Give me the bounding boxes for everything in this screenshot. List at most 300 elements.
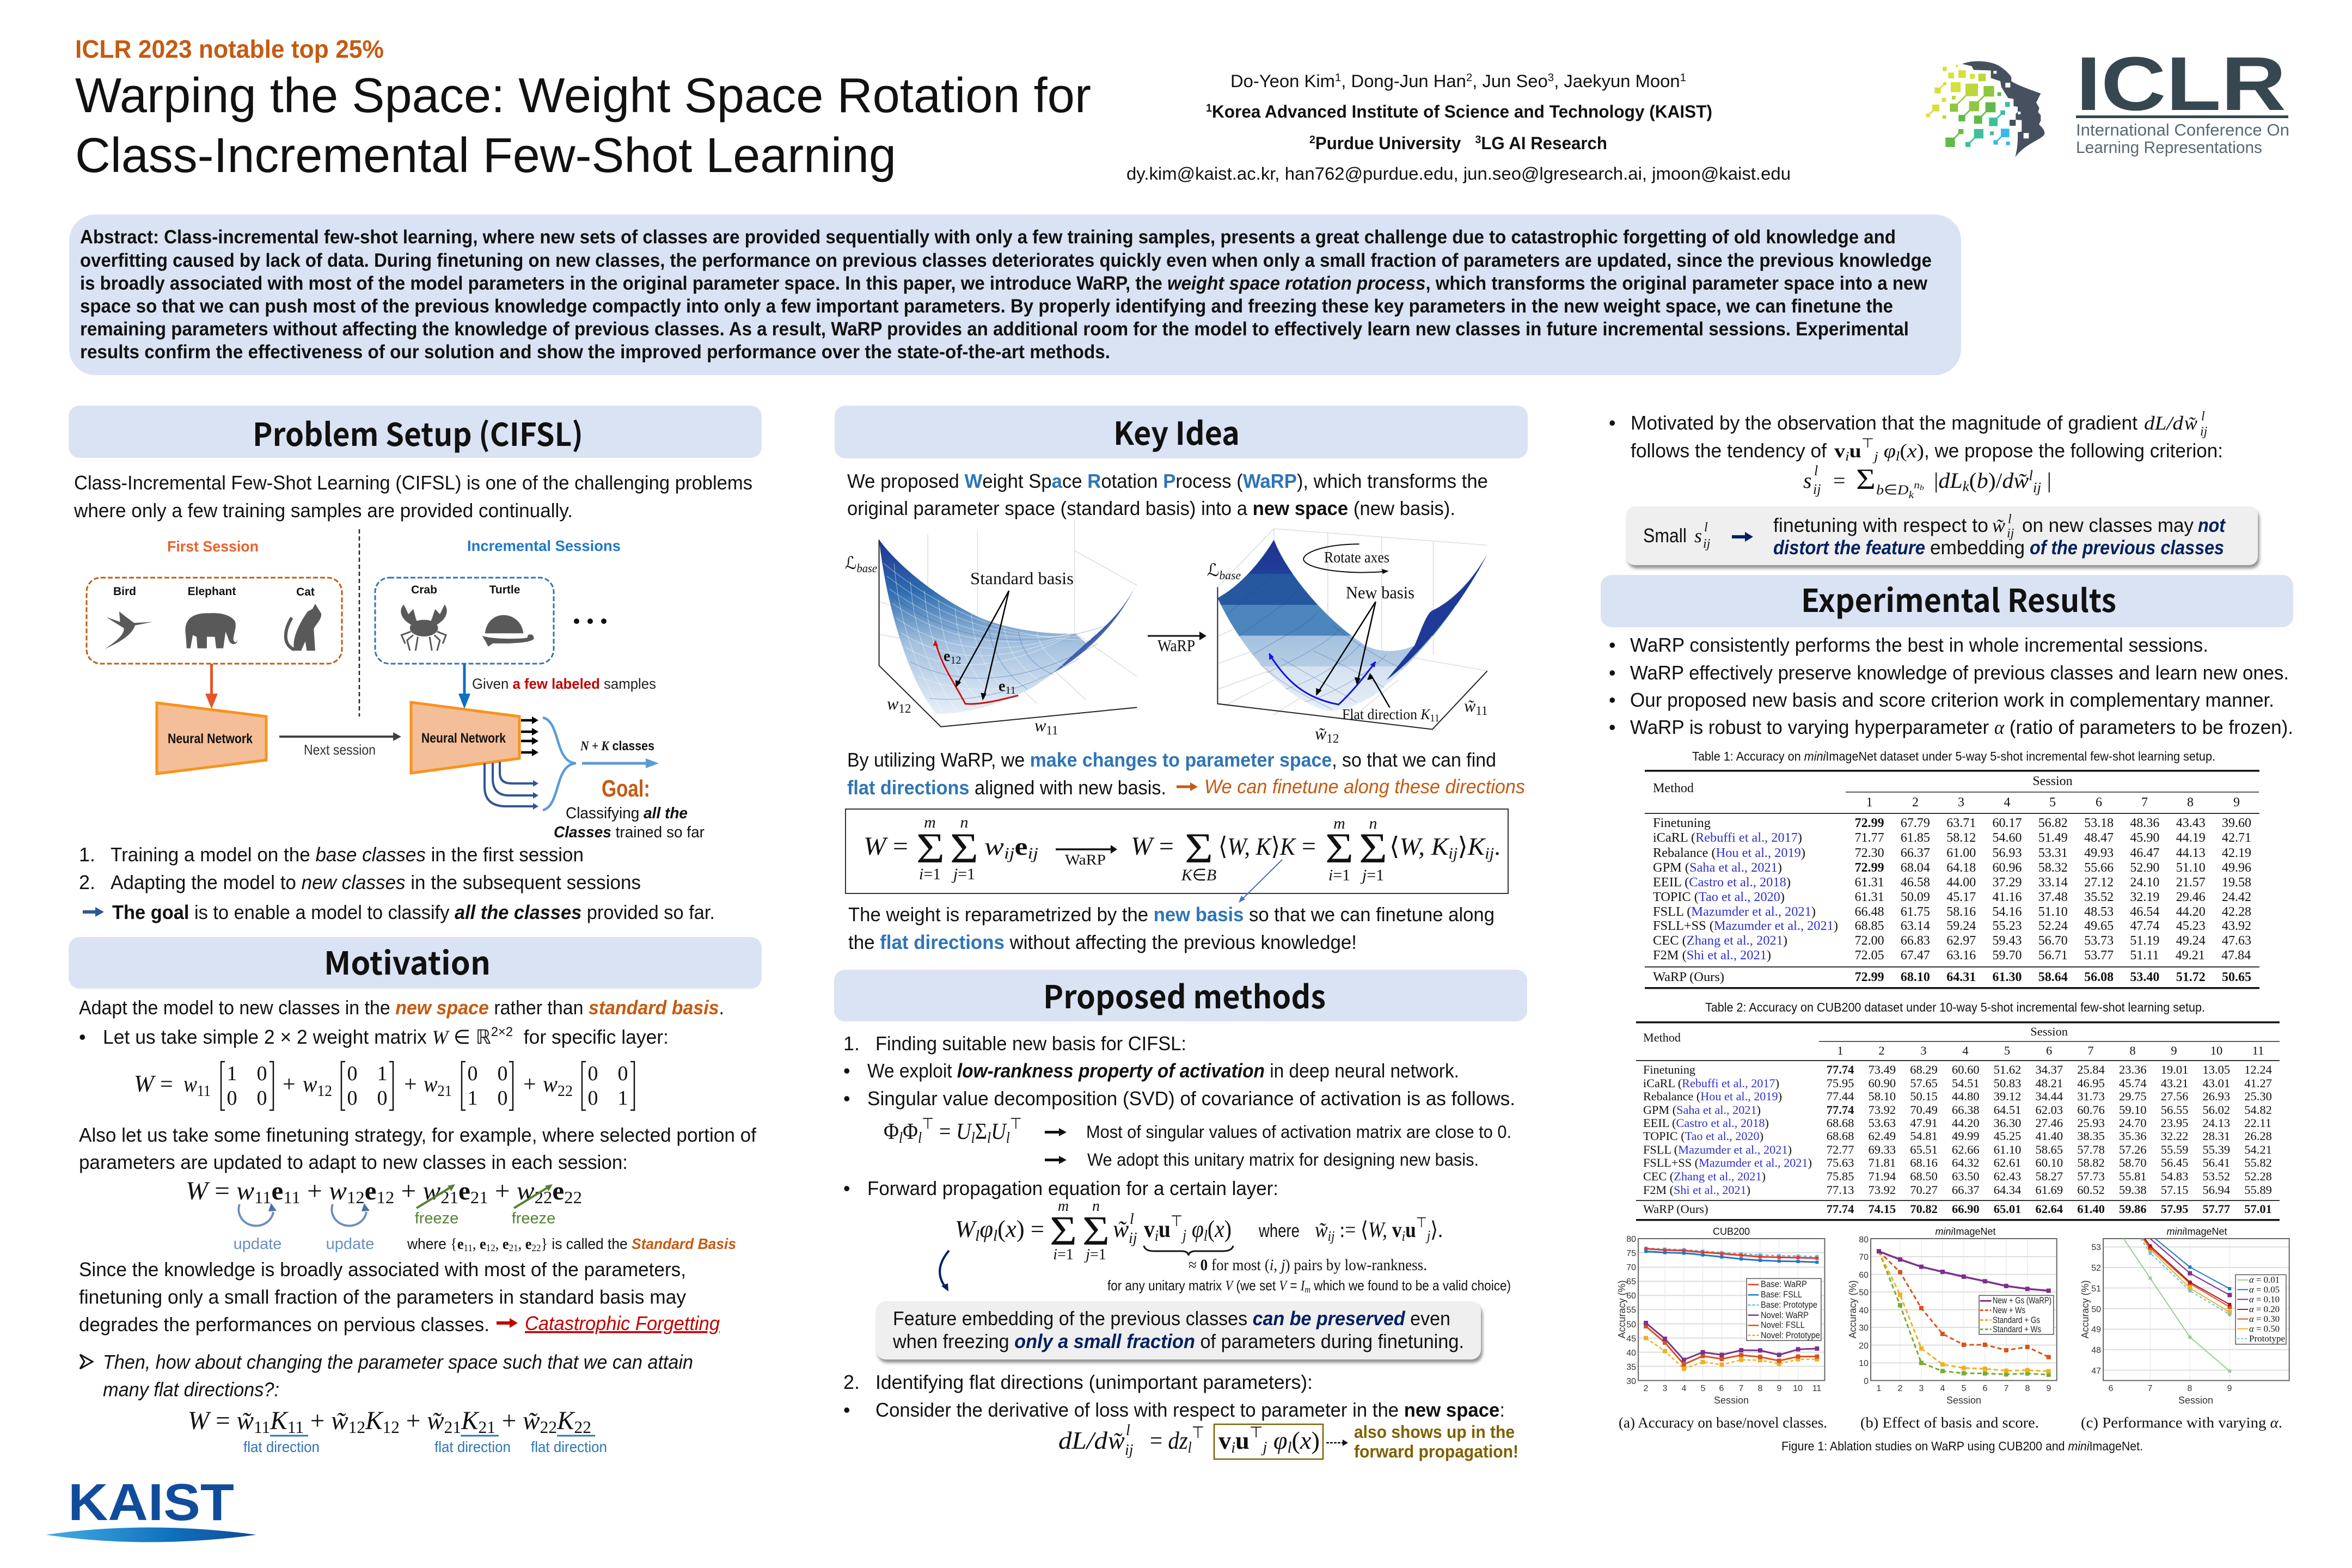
arrow: incremental session to network bbox=[458, 664, 470, 709]
icons: animals bbox=[105, 604, 534, 651]
text block: gradient observation: v bbox=[1834, 440, 1845, 462]
equation: SVD: l bbox=[971, 1130, 975, 1147]
equation box: reparametrization: ij bbox=[1448, 844, 1457, 862]
equation: forward propagation: m bbox=[1058, 1198, 1069, 1215]
arrow: first session to network bbox=[205, 664, 218, 709]
equation: derivative of loss: j bbox=[1261, 1439, 1267, 1456]
equation: forward propagation: Σ bbox=[1050, 1208, 1077, 1254]
equation: flat directions: flat direction bbox=[243, 1438, 320, 1455]
KAIST logo: KAIST bbox=[68, 1473, 234, 1532]
equation: score criterion: l bbox=[2029, 468, 2033, 483]
equation box: reparametrization: i=1 bbox=[919, 865, 941, 883]
text block: catastrophic forgetting bbox=[79, 1258, 720, 1336]
table 1: miniImageNet accuracy: WaRP (Ours) bbox=[1653, 970, 1724, 984]
equation box: reparametrization: . bbox=[1494, 832, 1500, 860]
equation: flat directions: w̃ bbox=[427, 1406, 444, 1435]
equation box: reparametrization: ij bbox=[1004, 844, 1015, 862]
equation: standard basis with update and freeze: where {e bbox=[407, 1235, 464, 1253]
neural network: incremental bbox=[411, 702, 519, 773]
equation box: reparametrization: j=1 bbox=[951, 865, 975, 883]
authors and affiliations: , Jaekyun Moon bbox=[1554, 71, 1680, 91]
equation: SVD: l bbox=[987, 1130, 991, 1147]
equation: standard basis with update and freeze: 11 bbox=[283, 1187, 301, 1207]
equation: standard basis with update and freeze: w bbox=[329, 1177, 346, 1205]
equation: flat directions: 11 bbox=[287, 1417, 304, 1437]
list: training steps: Training a model on the base classes in the first session bbox=[111, 843, 584, 866]
table 1: miniImageNet accuracy: Rebalance (Hou et al., 2019) bbox=[1653, 846, 1805, 860]
text block: gradient observation: , we propose the following criterion: bbox=[1924, 439, 2223, 462]
equation: forward propagation: l bbox=[993, 1227, 997, 1245]
text block: adapt: for specific layer: bbox=[513, 1026, 669, 1048]
table 2: CUB200 accuracy: WaRP (Ours) bbox=[1643, 1202, 1708, 1216]
chart: CUB200 base and novel accuracy: 5 bbox=[1701, 1384, 1706, 1393]
table 1: miniImageNet accuracy: EEIL (Castro et al., 2018) bbox=[1653, 875, 1791, 890]
table 2: CUB200 accuracy: 10 bbox=[2210, 1044, 2222, 1057]
table 1: miniImageNet accuracy: CEC (Zhang et al., 2021) bbox=[1653, 934, 1787, 948]
chart: CUB200 base and novel accuracy: 50 bbox=[1626, 1320, 1636, 1330]
panel: abstract: overfitting caused by lack of data. During finetuning on new classes, the performance on previous classes deteriorates quickly even when only a small fraction of parameters are updated, since the previous knowledge bbox=[80, 250, 1932, 271]
callout: feature embedding preserved bbox=[876, 1301, 1481, 1359]
equation: forward propagation: W bbox=[955, 1216, 975, 1242]
table 1: miniImageNet accuracy: 5 bbox=[2049, 795, 2056, 810]
chart: miniImageNet effect of basis and score: Accuracy (%) bbox=[1847, 1280, 1858, 1339]
table 1: miniImageNet accuracy: 72.30 66.37 61.00 56.93 53.31 49.93 46.47 44.13 42.19 bbox=[1855, 846, 2251, 860]
chart: new basis loss surface bbox=[1207, 529, 1487, 745]
equation: forward propagation bbox=[955, 1198, 1511, 1295]
chart: miniImageNet varying alpha: 6 bbox=[2109, 1384, 2114, 1393]
equation box: reparametrization: ij bbox=[1485, 844, 1494, 862]
equation: forward propagation: where bbox=[1258, 1221, 1300, 1241]
equation: matrix decomposition: 0 bbox=[588, 1062, 598, 1085]
panel: abstract: space so that we can push most of the previous knowledge compactly into only a few important parameters. By properly identifying and freezing these key parameters in the new weight space, we can finetune the bbox=[80, 296, 1893, 317]
text block: gradient observation: ( bbox=[1900, 440, 1907, 462]
heading: Experimental Results bbox=[1601, 575, 2293, 627]
text block: gradient observation: w̃ bbox=[2184, 412, 2197, 434]
chart: miniImageNet varying alpha: miniImageNet bbox=[2166, 1226, 2227, 1237]
text block: question bbox=[80, 1351, 693, 1400]
list: result bullets: • bbox=[1609, 716, 1616, 738]
table 1: miniImageNet accuracy: 9 bbox=[2233, 795, 2240, 810]
callout: small score: l bbox=[1704, 520, 1708, 535]
chart: miniImageNet varying alpha bbox=[2080, 1226, 2289, 1406]
equation: matrix decomposition: 0 bbox=[257, 1087, 267, 1110]
equation: matrix decomposition: 0 bbox=[377, 1087, 388, 1110]
equation box: reparametrization: w bbox=[984, 832, 1001, 860]
equation: score criterion: = bbox=[1833, 468, 1846, 493]
list: training steps: 2. bbox=[79, 871, 95, 893]
chart: CUB200 base and novel accuracy: Base: WaRP bbox=[1761, 1279, 1807, 1289]
chart: miniImageNet varying alpha: 7 bbox=[2148, 1384, 2153, 1393]
equation: matrix decomposition: 0 bbox=[257, 1062, 267, 1085]
equation: standard basis with update and freeze: 21 bbox=[440, 1187, 458, 1207]
table 1: miniImageNet accuracy: 72.99 67.79 63.71 60.17 56.82 53.18 48.36 43.43 39.60 bbox=[1855, 816, 2251, 830]
equation box: reparametrization: Σ bbox=[1325, 824, 1353, 872]
text block: finetuning strategy: Also let us take some finetuning strategy, for example, where selected portion of bbox=[79, 1124, 757, 1146]
callout: small score bbox=[1626, 506, 2258, 565]
equation: flat directions: 11 bbox=[254, 1417, 270, 1437]
equation: forward propagation: φ bbox=[1186, 1216, 1204, 1242]
chart: CUB200 base and novel accuracy: 75 bbox=[1626, 1249, 1636, 1258]
equation box: reparametrization: Σ bbox=[950, 824, 978, 872]
equation: matrix decomposition: 1 bbox=[226, 1062, 237, 1085]
table 2: CUB200 accuracy: 75.95 60.90 57.65 54.51 50.83 48.21 46.95 45.74 43.21 43.01 41.27 bbox=[1827, 1076, 2272, 1090]
equation box: reparametrization: m bbox=[924, 813, 936, 831]
authors and affiliations: 2 bbox=[1466, 72, 1472, 84]
equation: forward propagation: ( bbox=[997, 1216, 1006, 1242]
text block: gradient observation: l bbox=[2201, 409, 2205, 424]
text block: finetuning strategy bbox=[79, 1124, 757, 1173]
chart: CUB200 base and novel accuracy: 60 bbox=[1626, 1291, 1636, 1301]
equation: standard basis with update and freeze: W = w bbox=[186, 1177, 254, 1205]
table 2: CUB200 accuracy: 5 bbox=[2004, 1044, 2010, 1057]
figure captions: (b) Effect of basis and score. bbox=[1860, 1414, 2039, 1431]
equation: derivative of loss: dL/d bbox=[1058, 1426, 1108, 1454]
text block: reparametrized bbox=[848, 903, 1494, 953]
equation: forward propagation: ⊤ bbox=[1171, 1212, 1183, 1230]
chart: CUB200 base and novel accuracy: 65 bbox=[1626, 1277, 1636, 1287]
equation: score criterion: b∈D bbox=[1876, 483, 1904, 498]
equation: flat directions: K bbox=[556, 1406, 575, 1435]
label: given a few labeled samples: Given a few labeled samples bbox=[472, 676, 656, 692]
table 2: CUB200 accuracy: 7 bbox=[2087, 1044, 2094, 1057]
equation box: reparametrization: ⟨W, K bbox=[1389, 831, 1447, 861]
equation: forward propagation: j bbox=[1181, 1227, 1186, 1244]
equation box: reparametrization bbox=[846, 809, 1508, 893]
panel: abstract: remaining parameters without affecting the knowledge of previous classes. As a result, WaRP provides an additional room for the model to effectively learn new classes in future incremental sessions. Experimental bbox=[80, 318, 1909, 340]
chart: new basis loss surface: 11 bbox=[1430, 713, 1440, 724]
equation: score criterion: k bbox=[1963, 479, 1969, 494]
equation: matrix decomposition: 0 bbox=[588, 1087, 598, 1110]
chart: miniImageNet effect of basis and score: 30 bbox=[1859, 1324, 1869, 1333]
equation: standard basis with update and freeze: + bbox=[394, 1177, 423, 1205]
text block: question: many flat directions?: bbox=[103, 1379, 279, 1400]
equation box: reparametrization: W = bbox=[1131, 832, 1174, 861]
chart: miniImageNet varying alpha: 53 bbox=[2091, 1243, 2101, 1252]
chart: standard basis loss surface: 12 bbox=[950, 654, 961, 666]
conference badge: ICLR 2023 notable top 25%: ICLR 2023 notable top 25% bbox=[75, 35, 384, 63]
text block: SVD consequences bbox=[1045, 1122, 1511, 1169]
chart: CUB200 base and novel accuracy: 7 bbox=[1739, 1384, 1744, 1393]
chart: miniImageNet varying alpha: 9 bbox=[2227, 1384, 2232, 1393]
chart: miniImageNet effect of basis and score: 4 bbox=[1940, 1384, 1945, 1393]
table 2: CUB200 accuracy: Finetuning bbox=[1643, 1063, 1695, 1076]
equation: flat directions: + bbox=[495, 1406, 523, 1435]
list: result bullets: • bbox=[1609, 689, 1616, 711]
text block: gradient observation: Motivated by the observation that the magnitude of gradient bbox=[1631, 412, 2137, 434]
annotation: also shows up in forward propagation bbox=[1326, 1422, 1518, 1461]
text block: adapt: 2×2 bbox=[491, 1025, 513, 1039]
equation box: reparametrization: ij bbox=[1027, 844, 1038, 862]
text block: gradient observation: u bbox=[1849, 440, 1861, 462]
neural network: incremental: Neural Network bbox=[421, 731, 506, 746]
equation: standard basis with update and freeze: e bbox=[272, 1177, 283, 1205]
equation: matrix decomposition: = bbox=[160, 1072, 173, 1097]
equation: standard basis with update and freeze: 12 bbox=[486, 1242, 495, 1253]
authors and affiliations: 3 bbox=[1475, 134, 1481, 146]
equation: derivative of loss: ⊤ bbox=[1192, 1423, 1204, 1442]
chart: standard basis loss surface: e bbox=[944, 648, 950, 665]
text block: CIFSL definition bbox=[74, 471, 752, 522]
text block: forward propagation: Forward propagation equation for a certain layer: bbox=[867, 1177, 1278, 1199]
equation: score criterion: ( bbox=[1969, 468, 1977, 493]
equation box: reparametrization: K bbox=[1468, 832, 1484, 860]
chart: miniImageNet effect of basis and score: 5 bbox=[1962, 1384, 1967, 1393]
table 2: CUB200 accuracy: CEC (Zhang et al., 2021) bbox=[1643, 1169, 1766, 1183]
text block: reparametrized: The weight is reparametrized by the new basis so that we can finetune along bbox=[848, 903, 1494, 926]
equation: forward propagation: u bbox=[1405, 1217, 1416, 1242]
chart: CUB200 base and novel accuracy: Session bbox=[1714, 1395, 1749, 1406]
equation: standard basis with update and freeze: 21 bbox=[509, 1242, 518, 1253]
equation: matrix decomposition: 21 bbox=[438, 1082, 452, 1100]
callout: small score: finetuning with respect to bbox=[1773, 514, 1988, 536]
equation: matrix decomposition: 0 bbox=[467, 1062, 478, 1085]
equation: SVD: Σ bbox=[975, 1119, 987, 1144]
equation: matrix decomposition: 0 bbox=[347, 1087, 357, 1110]
text block: catastrophic forgetting: Catastrophic Forgetting bbox=[525, 1312, 720, 1334]
equation box: reparametrization: n bbox=[1369, 814, 1377, 832]
equation: derivative of loss: = dz bbox=[1150, 1426, 1190, 1454]
arrow: next session bbox=[279, 732, 401, 758]
equation box: reparametrization: m bbox=[1333, 814, 1345, 832]
list: result bullets: WaRP effectively preserve knowledge of previous classes and learn new ones. bbox=[1630, 661, 2289, 684]
authors and affiliations: 1 bbox=[1206, 102, 1212, 114]
chart: new basis loss surface: base bbox=[1220, 568, 1241, 582]
table 2: CUB200 accuracy: 8 bbox=[2129, 1044, 2136, 1057]
table 1: miniImageNet accuracy: 72.99 68.04 64.18 60.96 58.32 55.66 52.90 51.10 49.96 bbox=[1855, 861, 2251, 875]
list: result bullets bbox=[1609, 634, 2293, 738]
list: result bullets: WaRP is robust to varying hyperparameter α (ratio of parameters to be frozen). bbox=[1630, 716, 2293, 738]
table 2: CUB200 accuracy: F2M (Shi et al., 2021) bbox=[1643, 1183, 1750, 1197]
equation: matrix decomposition: 12 bbox=[317, 1082, 332, 1100]
authors and affiliations: dy.kim@kaist.ac.kr, han762@purdue.edu, jun.seo@lgresearch.ai, jmoon@kaist.edu bbox=[1126, 164, 1791, 183]
equation: forward propagation: l bbox=[975, 1227, 979, 1245]
heading: Motivation: Motivation bbox=[324, 938, 491, 984]
text block: catastrophic forgetting: finetuning only a small fraction of the parameters in standard basis may bbox=[79, 1286, 686, 1308]
text block: finding new basis bbox=[843, 1032, 1515, 1110]
table 2: CUB200 accuracy: 72.77 69.33 65.51 62.66 61.10 58.65 57.78 57.26 55.59 55.39 54.21 bbox=[1827, 1143, 2272, 1156]
text block: gradient observation: ij bbox=[2200, 425, 2208, 439]
equation: forward propagation: l bbox=[1130, 1211, 1134, 1228]
text block: SVD consequences: We adopt this unitary matrix for designing new basis. bbox=[1087, 1150, 1479, 1169]
equation: matrix decomposition: 1 bbox=[617, 1087, 628, 1110]
table 2: CUB200 accuracy: 77.44 58.10 50.15 44.80 39.12 34.44 31.73 29.75 27.56 26.93 25.30 bbox=[1827, 1089, 2272, 1103]
equation: flat directions: 12 bbox=[383, 1417, 400, 1437]
chart: CUB200 base and novel accuracy: 70 bbox=[1626, 1263, 1636, 1272]
chart: miniImageNet varying alpha: α = 0.10 bbox=[2249, 1294, 2280, 1304]
chart: miniImageNet varying alpha: 51 bbox=[2091, 1284, 2101, 1294]
chart: new basis loss surface: ℒ bbox=[1207, 560, 1220, 580]
table 2: CUB200 accuracy: 77.74 73.49 68.29 60.60 51.62 34.37 25.84 23.36 19.01 13.05 12.24 bbox=[1827, 1063, 2272, 1076]
goal text: Classes trained so far bbox=[554, 824, 705, 841]
equation box: reparametrization: e bbox=[1015, 832, 1027, 860]
equation: standard basis with update and freeze: is called the Standard Basis bbox=[552, 1235, 743, 1252]
table 2: CUB200 accuracy: Session bbox=[2030, 1025, 2068, 1038]
equation: flat directions: 12 bbox=[348, 1417, 365, 1437]
chart: miniImageNet effect of basis and score: 20 bbox=[1859, 1342, 1869, 1351]
equation: score criterion: n bbox=[1914, 480, 1920, 491]
text block: gradient observation: j bbox=[1872, 450, 1878, 464]
table 2: CUB200 accuracy: 2 bbox=[1878, 1044, 1885, 1057]
text block: SVD consequences: Most of singular values of activation matrix are close to 0. bbox=[1086, 1122, 1511, 1142]
equation: flat directions: K bbox=[365, 1406, 384, 1435]
chart: miniImageNet effect of basis and score: 6 bbox=[1983, 1384, 1988, 1393]
table 1: miniImageNet accuracy bbox=[1645, 749, 2259, 989]
chart: miniImageNet varying alpha: Prototype bbox=[2249, 1333, 2285, 1344]
panel: motivation bbox=[69, 937, 762, 1455]
chart: CUB200 base and novel accuracy: 55 bbox=[1626, 1306, 1636, 1315]
callout: small score: ij bbox=[1703, 537, 1711, 551]
equation: derivative of loss: i bbox=[1231, 1440, 1235, 1456]
authors and affiliations: 1 bbox=[1335, 72, 1341, 84]
equation: forward propagation: ij bbox=[1129, 1230, 1137, 1247]
equation: standard basis with update and freeze: 12 bbox=[376, 1187, 394, 1207]
chart: new basis loss surface: w̃ bbox=[1464, 696, 1475, 715]
equation: score criterion: b)/dw̃ bbox=[1977, 468, 2028, 493]
diagram: first and incremental sessions: Turtle bbox=[489, 584, 520, 596]
equation: SVD: ⊤ bbox=[922, 1114, 934, 1132]
goal text: Goal: bbox=[602, 775, 650, 802]
equation: forward propagation: ij bbox=[1328, 1228, 1334, 1244]
text block: gradient observation: • bbox=[1609, 412, 1616, 434]
text block: finding new basis: • bbox=[843, 1087, 850, 1110]
chart: miniImageNet varying alpha: α = 0.20 bbox=[2249, 1304, 2280, 1314]
equation: forward propagation: ( bbox=[1208, 1216, 1215, 1242]
chart: miniImageNet varying alpha: Accuracy (%) bbox=[2080, 1280, 2091, 1339]
equation: standard basis with update and freeze: , bbox=[518, 1236, 525, 1253]
equation: standard basis with update and freeze: e bbox=[365, 1177, 376, 1205]
panel: criterion bbox=[1609, 409, 2258, 565]
table 1: miniImageNet accuracy: 4 bbox=[2004, 795, 2010, 810]
equation: standard basis with update and freeze: 22 bbox=[535, 1187, 552, 1207]
authors and affiliations: , Dong-Jun Han bbox=[1341, 71, 1466, 91]
chart: CUB200 base and novel accuracy: Base: FSLL bbox=[1761, 1289, 1802, 1300]
callout: small score: l bbox=[2008, 512, 2012, 526]
table 1: miniImageNet accuracy: 71.77 61.85 58.12 54.60 51.49 48.47 45.90 44.19 42.71 bbox=[1855, 831, 2251, 845]
table 1: miniImageNet accuracy: GPM (Saha et al., 2021) bbox=[1653, 861, 1782, 875]
chart: new basis loss surface: 12 bbox=[1326, 732, 1339, 745]
equation: matrix decomposition: 0 bbox=[226, 1087, 237, 1110]
text block: adapt: Let us take simple 2 × 2 weight matrix W ∈ ℝ bbox=[103, 1026, 492, 1048]
arrow: WaRP transformation bbox=[1148, 632, 1206, 655]
table 1: miniImageNet accuracy: 8 bbox=[2187, 795, 2194, 810]
equation: matrix decomposition: 22 bbox=[558, 1082, 573, 1100]
chart: CUB200 base and novel accuracy: CUB200 bbox=[1713, 1226, 1750, 1237]
equation: matrix decomposition: 0 bbox=[498, 1062, 507, 1085]
equation: flat directions: w̃ bbox=[523, 1406, 540, 1435]
chart: miniImageNet effect of basis and score: 7 bbox=[2004, 1384, 2009, 1393]
chart: miniImageNet effect of basis and score bbox=[1847, 1226, 2057, 1406]
equation box: reparametrization: j=1 bbox=[1360, 866, 1384, 884]
chart: CUB200 base and novel accuracy: 45 bbox=[1626, 1334, 1636, 1344]
chart: miniImageNet varying alpha: 47 bbox=[2091, 1367, 2101, 1376]
neural network: first: Neural Network bbox=[168, 731, 253, 746]
chart: miniImageNet effect of basis and score: 0 bbox=[1864, 1377, 1869, 1386]
equation: forward propagation: u bbox=[1159, 1216, 1171, 1242]
equation box: reparametrization: ⟨W, K⟩K bbox=[1218, 831, 1296, 861]
equation: matrix decomposition: 0 bbox=[347, 1062, 357, 1085]
diagram: first and incremental sessions bbox=[87, 529, 705, 841]
text block: question: Then, how about changing the parameter space such that we can attain bbox=[103, 1351, 693, 1373]
equation box: reparametrization: Σ bbox=[916, 824, 945, 872]
table 2: CUB200 accuracy: 68.68 53.63 47.91 44.20 36.30 27.46 25.93 24.70 23.95 24.13 22.11 bbox=[1827, 1116, 2271, 1130]
table 1: miniImageNet accuracy: Table 1: Accuracy on miniImageNet dataset under 5-way 5-shot incremental few-shot learning setup. bbox=[1692, 749, 2215, 763]
equation: standard basis with update and freeze: 22 bbox=[531, 1242, 541, 1253]
text block: catastrophic forgetting: Since the knowledge is broadly associated with most of the parameters, bbox=[79, 1258, 686, 1281]
equation: flat directions: 22 bbox=[574, 1417, 591, 1437]
equation: matrix decomposition: 1 bbox=[377, 1062, 388, 1085]
equation: flat directions: 21 bbox=[479, 1417, 495, 1437]
equation: matrix decomposition: w bbox=[543, 1072, 558, 1097]
table 2: CUB200 accuracy: 9 bbox=[2171, 1044, 2177, 1057]
chart: miniImageNet varying alpha: Session bbox=[2178, 1395, 2213, 1406]
panel: abstract: is broadly associated with most of the model parameters in the original parameter space. In this paper, we introduce WaRP, the weight space rotation process, which transforms the original parameter space into a new bbox=[80, 273, 1928, 294]
chart: CUB200 base and novel accuracy: 80 bbox=[1626, 1235, 1636, 1244]
equation box: reparametrization: ⟩ bbox=[1457, 831, 1468, 861]
equation: matrix decomposition: w bbox=[183, 1072, 199, 1097]
text block: parameter space: By utilizing WaRP, we make changes to parameter space, so that we can find bbox=[847, 749, 1496, 771]
text block: reparametrized: the flat directions without affecting the previous knowledge! bbox=[848, 931, 1357, 953]
heading: Proposed methods: Proposed methods bbox=[1043, 972, 1326, 1018]
table 2: CUB200 accuracy: EEIL (Castro et al., 2018) bbox=[1643, 1116, 1769, 1130]
table 1: miniImageNet accuracy: 7 bbox=[2141, 795, 2148, 810]
arrow: pointing to new basis bbox=[1239, 860, 1282, 903]
chart: standard basis loss surface: e bbox=[999, 678, 1005, 695]
diagram: first and incremental sessions: Crab bbox=[411, 584, 437, 596]
chart: miniImageNet effect of basis and score: New + Gs (WaRP) bbox=[1993, 1295, 2051, 1306]
table 2: CUB200 accuracy: TOPIC (Tao et al., 2020) bbox=[1643, 1129, 1763, 1143]
equation: SVD: l bbox=[899, 1130, 903, 1147]
equation: derivative of loss: ⊤ bbox=[1250, 1423, 1263, 1441]
equation box: reparametrization: W = bbox=[863, 832, 908, 861]
chart: miniImageNet varying alpha: 48 bbox=[2091, 1346, 2101, 1355]
equation: forward propagation: := bbox=[1334, 1217, 1361, 1242]
annotation: also shows up in forward propagation: forward propagation! bbox=[1354, 1442, 1518, 1461]
equation: derivative of loss bbox=[1058, 1422, 1323, 1459]
equation: derivative of loss: ( bbox=[1291, 1426, 1300, 1454]
equation: standard basis with update and freeze: 21 bbox=[470, 1187, 488, 1207]
equation: score criterion: b bbox=[1920, 484, 1924, 492]
text block: adapt bbox=[79, 996, 724, 1048]
table 1: miniImageNet accuracy: TOPIC (Tao et al., 2020) bbox=[1653, 890, 1785, 904]
equation: matrix decomposition: + bbox=[523, 1072, 536, 1097]
callout: small score: s bbox=[1694, 525, 1702, 547]
authors and affiliations: , Jun Seo bbox=[1472, 71, 1548, 91]
text block: WaRP intro: We proposed Weight Space Rotation Process (WaRP), which transforms the bbox=[847, 470, 1488, 492]
equation: score criterion: Σ bbox=[1856, 463, 1876, 495]
chart: new basis loss surface: New basis bbox=[1346, 583, 1414, 602]
chart: miniImageNet effect of basis and score: 3 bbox=[1919, 1384, 1924, 1393]
equation box: reparametrization: i=1 bbox=[1328, 866, 1350, 884]
equation: forward propagation: which we found to be a valid choice) bbox=[1310, 1277, 1511, 1294]
table 2: CUB200 accuracy: iCaRL (Rebuffi et al., 2017) bbox=[1643, 1076, 1779, 1090]
chart: miniImageNet varying alpha: α = 0.01 bbox=[2249, 1275, 2280, 1285]
diagram: first and incremental sessions: Cat bbox=[296, 586, 315, 598]
table 2: CUB200 accuracy: Table 2: Accuracy on CUB200 dataset under 10-way 5-shot incremental few-shot learning setup. bbox=[1705, 1000, 2205, 1014]
title: Warping the Space: Weight Space Rotation for bbox=[75, 69, 1091, 123]
equation: flat directions: 22 bbox=[540, 1417, 557, 1437]
brace and output arrow bbox=[543, 718, 659, 810]
chart: miniImageNet effect of basis and score: Session bbox=[1946, 1395, 1981, 1406]
figure captions: (a) Accuracy on base/novel classes. bbox=[1619, 1414, 1827, 1431]
equation: derivative of loss: w̃ bbox=[1108, 1426, 1125, 1454]
goal text bbox=[554, 775, 705, 841]
callout: small score: ij bbox=[2007, 526, 2014, 541]
equation: SVD: U bbox=[991, 1119, 1007, 1144]
text block: identifying flat directions: 2. bbox=[843, 1371, 860, 1393]
equation box: reparametrization: Σ bbox=[1359, 824, 1387, 872]
chart: miniImageNet effect of basis and score: 8 bbox=[2025, 1384, 2030, 1393]
equation: matrix decomposition: 0 bbox=[617, 1062, 628, 1085]
